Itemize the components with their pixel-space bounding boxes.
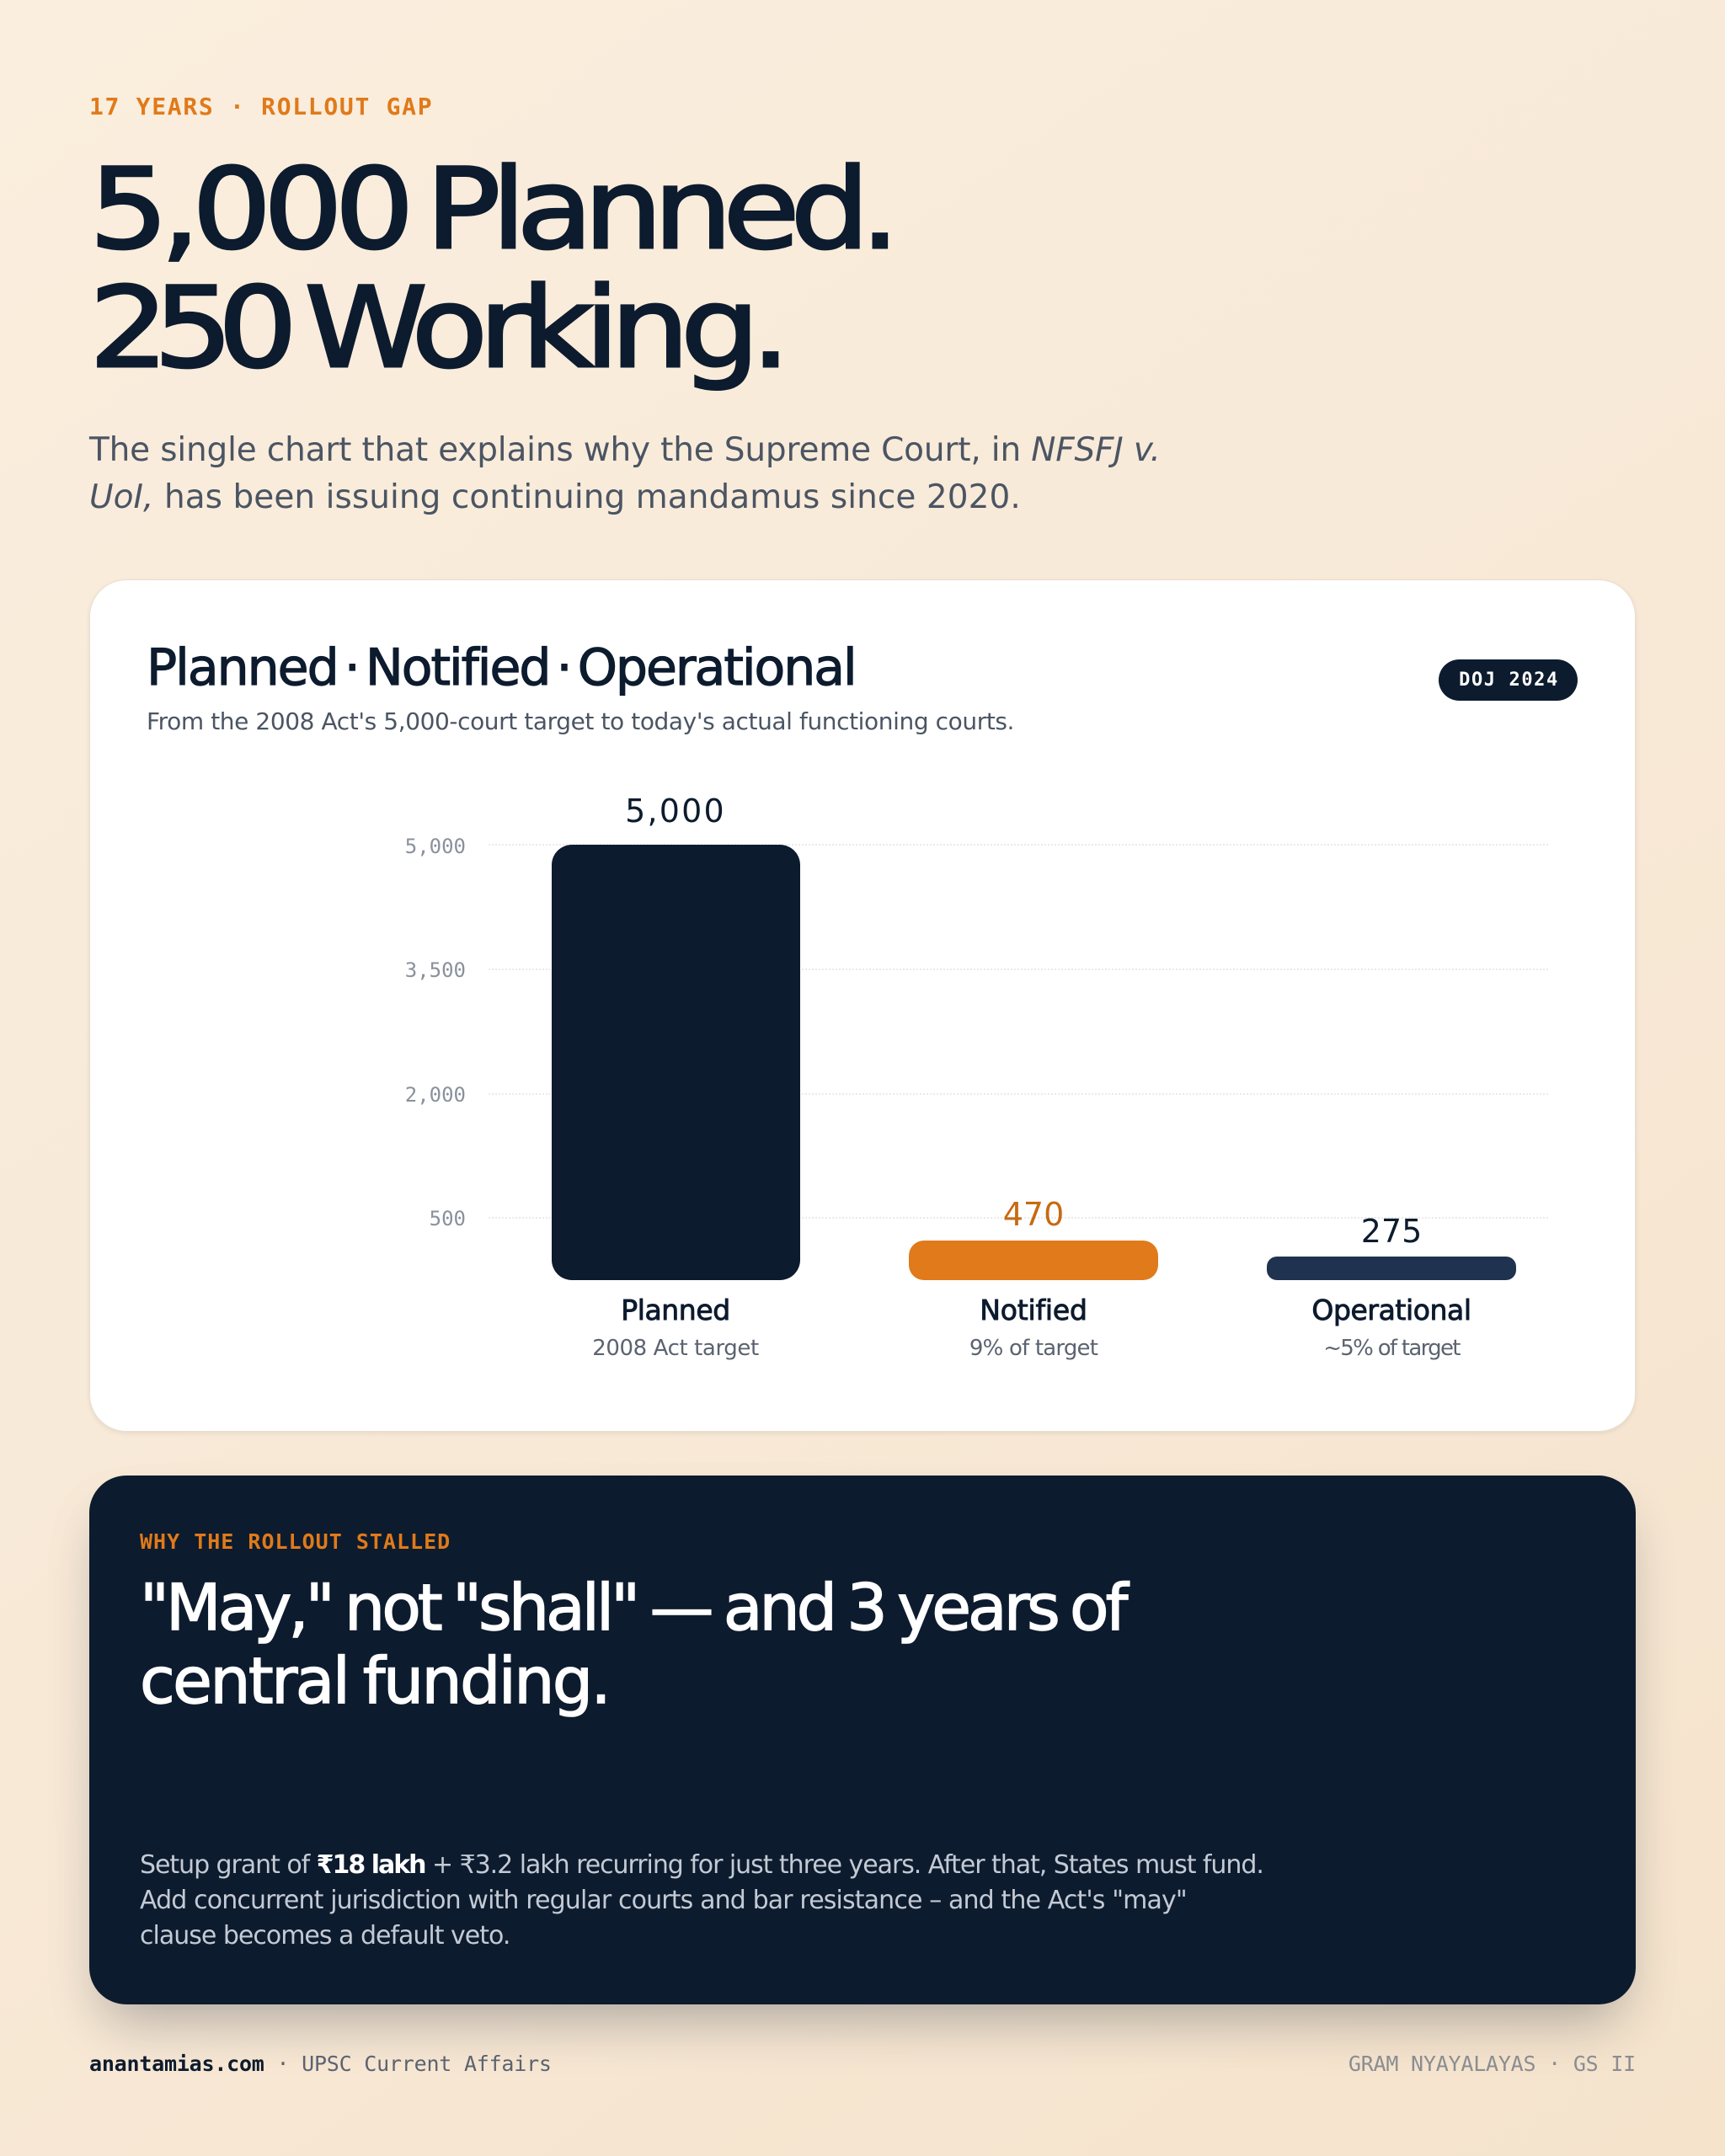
panel: why the rollout stalled [89,1476,1636,2004]
subtitle: UoI, has been issuing continuing mandamus since 2020. [89,478,1021,516]
chart heading: Planned · Notified · Operational [147,638,856,697]
note: planned: 2008 Act target [592,1336,759,1361]
badge: DOJ 2024: DOJ 2024 [1459,670,1559,691]
subtitle: The single chart that explains why the Supreme Court, in NFSFJ v. [89,431,1161,469]
bar: operational [1267,1257,1516,1280]
axis tick 3,500: 3,500 [405,958,466,982]
value: 275: 275 [1361,1213,1422,1250]
axis tick 500: 500 [430,1207,466,1230]
note: operational: ~5% of target [1323,1336,1460,1361]
callout body: clause becomes a default veto. [140,1921,510,1951]
value: 5,000: 5,000 [625,792,726,830]
callout body [140,1850,1263,1951]
callout heading [140,1570,1130,1718]
title: 250 Working. [89,264,782,393]
footer right: GRAM NYAYALAYAS · GS II [1348,2052,1636,2076]
label: notified: Notified [980,1294,1087,1326]
panel: chart card [89,579,1636,1432]
label: planned: Planned [621,1294,730,1326]
label: operational: Operational [1311,1294,1471,1326]
bar chart [405,792,1548,1361]
callout body: Add concurrent jurisdiction with regular courts and bar resistance – and the Act's "may" [140,1886,1187,1915]
callout body: Setup grant of ₹18 lakh + ₹3.2 lakh recurring for just three years. After that, States must fund. [140,1850,1263,1880]
chart subheading: From the 2008 Act's 5,000-court target to today's actual functioning courts. [147,707,1014,735]
axis tick 5,000: 5,000 [405,835,466,858]
subtitle [89,431,1161,516]
callout heading: central funding. [140,1643,609,1718]
axis tick 2,000: 2,000 [405,1083,466,1107]
eyebrow: 17 YEARS · ROLLOUT GAP [89,93,433,120]
badge: DOJ 2024 [1439,659,1578,701]
bar: notified [909,1241,1158,1280]
title: 5,000 Planned. [89,145,890,275]
bar: planned [552,845,800,1280]
callout eyebrow: WHY THE ROLLOUT STALLED [140,1529,451,1554]
value: 470: 470 [1003,1196,1064,1233]
title [89,145,890,393]
note: notified: 9% of target [969,1336,1097,1361]
footer left: anantamias.com · UPSC Current Affairs [89,2052,552,2076]
callout heading: "May," not "shall" — and 3 years of [140,1570,1125,1645]
